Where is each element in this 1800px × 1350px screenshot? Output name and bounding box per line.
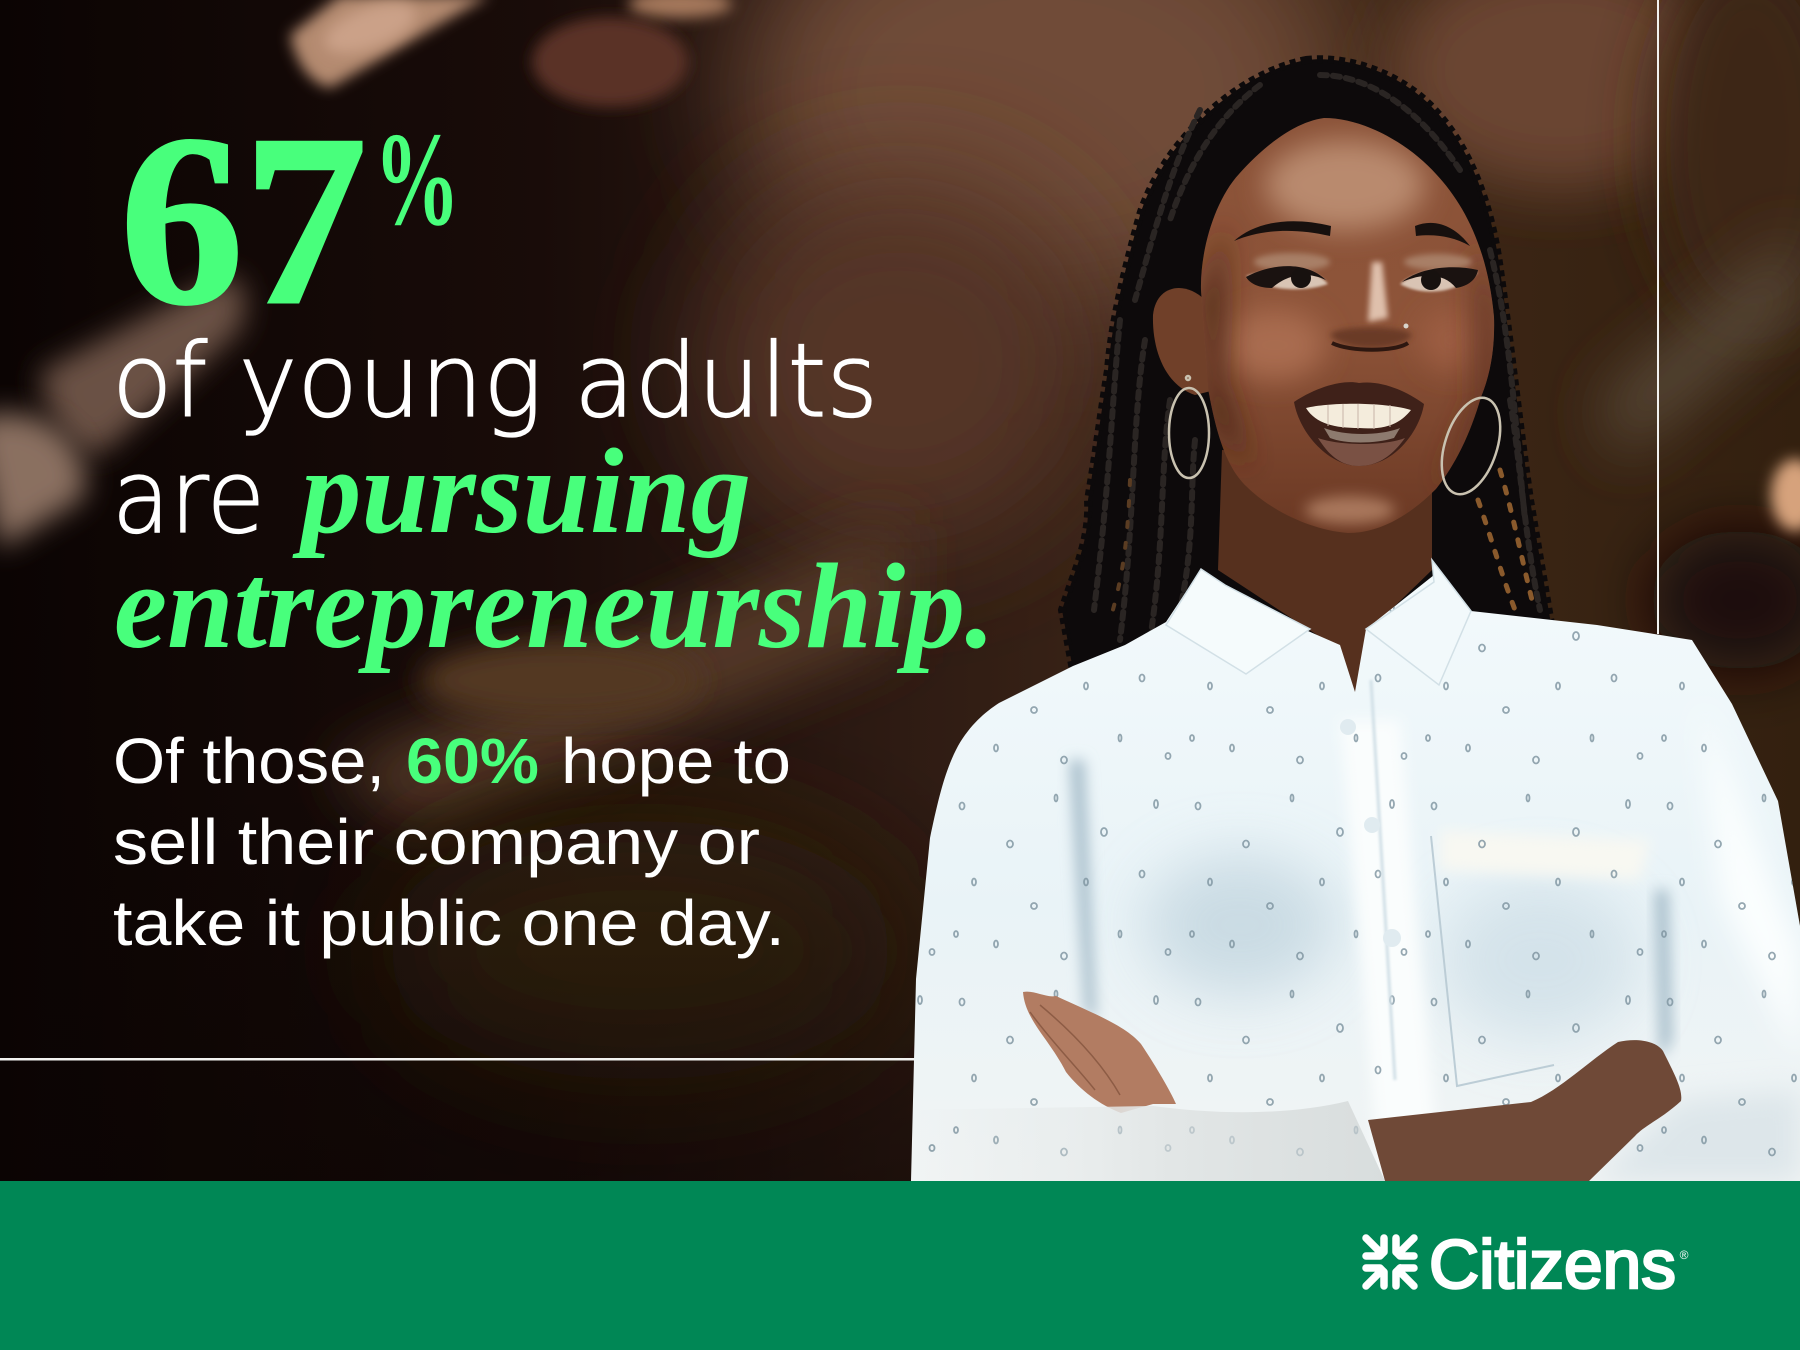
crossed arm: right forearm xyxy=(1368,1040,1681,1181)
supporting text: Of those, xyxy=(113,725,385,797)
wordmark: Citizens xyxy=(1429,1226,1676,1303)
headline text: pursuing xyxy=(292,424,751,559)
supporting text: take it public one day. xyxy=(113,887,785,959)
headline stat: 67%: 67 xyxy=(120,85,367,355)
white blouse xyxy=(900,560,1800,1181)
supporting text: sell their company or xyxy=(113,806,760,878)
face xyxy=(1169,118,1511,533)
Citizens logo xyxy=(1366,1226,1689,1303)
eyebrows xyxy=(1234,221,1331,241)
mouth and smile xyxy=(1294,382,1424,466)
crossed arm: left hand xyxy=(1023,992,1176,1113)
headline text: entrepreneurship. xyxy=(114,539,995,674)
hair with braids xyxy=(1062,59,1552,670)
eyes xyxy=(1254,253,1330,271)
headline text xyxy=(112,322,995,674)
headline text: of young adults xyxy=(112,322,878,441)
registered mark: ® xyxy=(1680,1248,1689,1262)
footer band xyxy=(0,1181,1800,1350)
earrings xyxy=(1169,376,1511,502)
nose xyxy=(1330,262,1412,350)
supporting text: 60% xyxy=(406,725,539,797)
icon: Citizens arrows mark xyxy=(1366,1238,1414,1286)
vertical white rule xyxy=(1657,0,1659,634)
photo: smiling woman xyxy=(900,59,1800,1185)
horizontal white rule xyxy=(0,1058,916,1060)
supporting text: hope to xyxy=(561,725,791,797)
headline text: are xyxy=(112,438,265,557)
ear xyxy=(1153,288,1215,395)
blouse cuff xyxy=(900,1095,1400,1185)
neck xyxy=(1218,450,1432,695)
headline stat: 67%: % xyxy=(374,105,460,253)
collar xyxy=(1166,569,1310,674)
supporting text xyxy=(113,725,791,959)
